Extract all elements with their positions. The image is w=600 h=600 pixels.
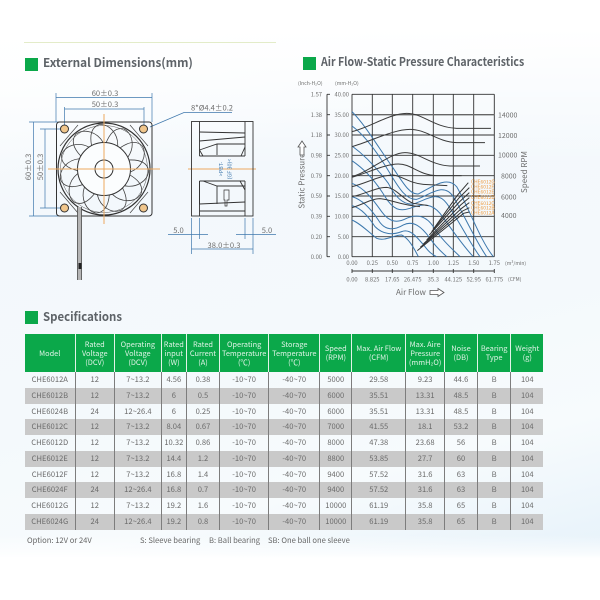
- row CHE6012C: 104: [521, 421, 534, 432]
- side view dimension lines: [168, 218, 276, 254]
- row CHE6012A: -40~70: [282, 374, 306, 385]
- bottom axis labels: 44.125: [444, 274, 462, 284]
- table header: Max. Air Flow (CFM): [356, 343, 401, 363]
- row CHE6024B: 104: [521, 406, 534, 416]
- dimension labels: 60±0.3: [23, 154, 34, 180]
- row CHE6012G: 1.6: [198, 500, 208, 511]
- row CHE6012A: 12: [91, 374, 99, 385]
- dimension labels: 38.0±0.3: [208, 240, 240, 251]
- bottom axis labels: 8.825: [365, 274, 380, 284]
- dimension labels: >PBT-: [217, 162, 225, 176]
- row CHE6012G: CHE6012G: [31, 500, 68, 511]
- left axis labels: 20.00: [335, 171, 349, 180]
- unit labels: (m³/min): [505, 260, 526, 267]
- row CHE6024B: -40~70: [282, 406, 306, 416]
- row CHE6012E: 60: [457, 453, 465, 464]
- fan blades: [55, 120, 152, 217]
- dimension labels: [23, 88, 272, 251]
- dimension labels: 60±0.3: [92, 88, 118, 99]
- bottom axis labels: 0.00: [346, 274, 358, 284]
- row CHE6012B: 35.51: [369, 390, 388, 401]
- row CHE6012D: 104: [521, 437, 534, 448]
- dimension labels: 8*Ø4.4±0.2: [191, 102, 233, 114]
- left axis labels: 1.18: [311, 130, 322, 139]
- row CHE6012A: -10~70: [232, 374, 256, 385]
- table header: [25, 334, 543, 372]
- row CHE6012G: 12: [91, 500, 99, 511]
- row CHE6012E: 8800: [327, 453, 344, 464]
- row CHE6024B: B: [492, 406, 497, 416]
- curve labels: CHE6012G: [471, 178, 495, 186]
- row CHE6012G: 35.8: [418, 500, 432, 511]
- row CHE6024G: 61.19: [369, 516, 388, 527]
- air flow chart: [296, 80, 530, 298]
- bottom axis labels: 26.475: [404, 274, 422, 284]
- row CHE6012B: [25, 388, 543, 404]
- footnote: voltage option: Option: 12V or 24V: [27, 535, 92, 546]
- row CHE6012B: 7~13.2: [126, 390, 149, 401]
- row CHE6012F: 1.4: [198, 468, 208, 480]
- right axis labels: 12000: [498, 131, 518, 141]
- dimension labels: 5.0: [262, 225, 272, 236]
- leader lines: [417, 183, 469, 251]
- left axis labels: 0.79: [311, 171, 322, 180]
- row CHE6024B: 6: [172, 406, 176, 416]
- row CHE6012G: B: [492, 500, 497, 511]
- black speed curves: [352, 113, 491, 208]
- bottom axis labels: 1.50: [468, 258, 479, 267]
- row CHE6012B: 48.5: [454, 390, 468, 401]
- curve labels: CHE6012D: [471, 194, 495, 201]
- blue pressure curves: [352, 112, 493, 257]
- row CHE6012E: 53.85: [369, 453, 388, 464]
- row CHE6012F: B: [492, 468, 497, 480]
- chart grid: [327, 94, 494, 273]
- row CHE6024G: 12~26.4: [124, 516, 152, 527]
- table header: Rated input (W): [164, 338, 184, 368]
- row CHE6012C: B: [492, 421, 497, 432]
- row CHE6012E: CHE6012E: [32, 453, 68, 464]
- row CHE6012D: -40~70: [282, 437, 306, 448]
- row CHE6024F: 63: [457, 484, 465, 495]
- fan frame: [56, 122, 152, 216]
- row CHE6024B: [31, 404, 534, 419]
- row CHE6024G: 24: [91, 516, 99, 527]
- row CHE6012E: 104: [521, 453, 534, 464]
- row CHE6012G: 65: [457, 500, 465, 511]
- axis titles: Static Pressure: [296, 153, 308, 209]
- row CHE6024G: -40~70: [282, 516, 306, 527]
- row CHE6024F: B: [492, 484, 497, 495]
- left axis labels: 15.00: [335, 191, 349, 200]
- table header: Model: [39, 348, 60, 358]
- table header: Storage Temperature (℃): [272, 338, 316, 368]
- row CHE6024F: CHE6024F: [32, 484, 68, 495]
- row CHE6012E: -40~70: [282, 453, 306, 464]
- row CHE6024F: [25, 482, 543, 498]
- row CHE6012A: 7~13.2: [126, 374, 149, 385]
- bottom axis labels: 0.75: [407, 258, 418, 267]
- right axis labels: 14000: [498, 110, 518, 120]
- footnote: ball bearing: B: Ball bearing: [209, 535, 260, 546]
- row CHE6012D: -10~70: [232, 437, 256, 448]
- bottom axis labels: 0.25: [367, 258, 378, 267]
- top rule: [24, 42, 276, 43]
- row CHE6012B: CHE6012B: [31, 390, 68, 401]
- row CHE6012B: 13.31: [416, 390, 435, 401]
- row CHE6012F: 31.6: [418, 468, 432, 480]
- row CHE6012D: 8000: [327, 437, 344, 448]
- left axis labels: 0.39: [311, 212, 322, 220]
- row CHE6012F: 63: [457, 468, 465, 480]
- row CHE6024B: -10~70: [232, 406, 256, 416]
- row CHE6024B: 13.31: [416, 406, 435, 416]
- curve labels: CHE6012F: [471, 184, 494, 190]
- row CHE6024G: 0.8: [198, 516, 208, 527]
- row CHE6012D: 7~13.2: [126, 437, 149, 448]
- unit labels: [298, 80, 526, 283]
- footnote: sleeve bearing: S: Sleeve bearing: [140, 535, 200, 546]
- row CHE6012A: CHE6012A: [32, 374, 68, 385]
- row CHE6024G: 10000: [325, 516, 346, 527]
- row CHE6012A: 0.38: [196, 374, 210, 385]
- row CHE6012C: CHE6012C: [31, 421, 68, 432]
- table header: Speed (RPM): [325, 343, 347, 363]
- row CHE6012A: 9.23: [418, 374, 432, 385]
- dimension labels: (GF 30)<: [226, 159, 234, 179]
- row CHE6012E: 27.7: [418, 453, 432, 464]
- left axis labels: 10.00: [335, 212, 349, 220]
- row CHE6012A: 5000: [327, 374, 344, 385]
- row CHE6024F: -10~70: [232, 484, 256, 495]
- left axis labels: 30.00: [335, 130, 349, 139]
- table header: Max. Aire Pressure (mmH₂O): [409, 338, 441, 368]
- row CHE6024B: 12~26.4: [124, 406, 152, 416]
- left axis labels: 5.00: [338, 232, 349, 241]
- row CHE6012C: 12: [91, 421, 99, 432]
- row CHE6012C: 7~13.2: [126, 421, 149, 432]
- row CHE6012B: 104: [521, 390, 534, 401]
- row CHE6024F: 57.52: [369, 484, 388, 495]
- row CHE6012A: B: [492, 374, 497, 385]
- row CHE6024F: 9400: [327, 484, 344, 495]
- row CHE6012C: [25, 419, 543, 435]
- row CHE6012G: 19.2: [166, 500, 181, 511]
- row CHE6012F: 12: [91, 468, 99, 480]
- left axis labels: [311, 90, 349, 261]
- table header: Rated Current (A): [190, 338, 216, 368]
- left axis labels: 25.00: [335, 150, 349, 160]
- row CHE6012F: 104: [521, 468, 534, 480]
- row CHE6012C: -10~70: [232, 421, 256, 432]
- row CHE6012D: [31, 435, 534, 451]
- row CHE6012E: 12: [91, 453, 99, 464]
- curve labels: CHE6012B: [471, 204, 495, 212]
- row CHE6012F: CHE6012F: [32, 468, 68, 480]
- row CHE6012D: CHE6012D: [31, 437, 68, 448]
- right axis labels: 6000: [501, 192, 517, 202]
- row CHE6012F: -40~70: [282, 468, 306, 480]
- table header: Rated Voltage (DCV): [82, 338, 108, 368]
- row CHE6012G: -10~70: [232, 500, 256, 511]
- dimension labels: 5.0: [173, 225, 184, 236]
- bottom axis labels: 52.95: [466, 274, 481, 284]
- axis titles: Speed RPM: [519, 151, 530, 193]
- row CHE6012D: 0.86: [196, 437, 210, 448]
- left axis labels: 0.00: [338, 252, 349, 261]
- left axis labels: 0.59: [311, 191, 322, 200]
- row CHE6024B: 0.25: [196, 406, 210, 416]
- row CHE6012C: 53.2: [454, 421, 468, 432]
- corner mounting holes: [60, 125, 148, 212]
- table header: Operating Temperature (℃): [222, 338, 266, 368]
- row CHE6012F: -10~70: [232, 468, 256, 480]
- row CHE6024B: 48.5: [454, 406, 468, 416]
- axis titles: [296, 151, 530, 298]
- row CHE6012G: [31, 498, 534, 514]
- row CHE6024F: 104: [521, 484, 534, 495]
- unit labels: (mm-H₂O): [335, 80, 359, 87]
- row CHE6012C: 8.04: [166, 421, 181, 432]
- row CHE6012A: 104: [521, 374, 534, 385]
- dimension labels: 50±0.3: [92, 99, 118, 110]
- bottom axis labels: 61.775: [485, 274, 503, 284]
- front view fan drawing: [29, 93, 256, 280]
- row CHE6012D: 10.32: [164, 437, 183, 448]
- row CHE6012G: 10000: [325, 500, 346, 511]
- right axis labels: 8000: [501, 172, 517, 182]
- row CHE6012C: 18.1: [418, 421, 432, 432]
- left axis labels: 35.00: [335, 110, 349, 119]
- row CHE6012B: 6: [172, 390, 176, 401]
- row CHE6012C: -40~70: [282, 421, 306, 432]
- row CHE6024F: 16.8: [166, 484, 181, 495]
- left axis labels: 40.00: [335, 90, 349, 98]
- right axis labels: [498, 110, 518, 221]
- cable: [78, 207, 82, 280]
- axis titles: Air Flow: [396, 287, 427, 298]
- row CHE6012A: 29.58: [369, 374, 388, 385]
- row CHE6012A: 44.6: [454, 374, 468, 385]
- row CHE6012C: 41.55: [369, 421, 388, 432]
- row CHE6012B: 12: [91, 390, 99, 401]
- row CHE6012B: 0.5: [198, 390, 208, 401]
- row CHE6024B: 24: [91, 406, 99, 416]
- bottom axis labels: 0.50: [387, 258, 398, 267]
- row CHE6012G: 61.19: [369, 500, 388, 511]
- bottom axis labels: 0.00: [346, 258, 358, 267]
- bottom axis labels: 35.3: [428, 274, 439, 284]
- row CHE6024G: -10~70: [232, 516, 256, 527]
- left axis labels: 1.38: [311, 110, 322, 119]
- row CHE6012E: [25, 451, 543, 466]
- row CHE6012B: 6000: [327, 390, 344, 401]
- heading: air flow chart: Air Flow-Static Pressure Characteristics: [321, 53, 524, 70]
- unit labels: (Inch-H₂O): [298, 80, 323, 87]
- row CHE6012B: -40~70: [282, 390, 306, 401]
- row CHE6024F: 24: [91, 484, 99, 495]
- curve labels: CHE6012C: [471, 200, 495, 207]
- row CHE6012D: 47.38: [369, 437, 388, 448]
- orange centre lines: [48, 114, 160, 224]
- row CHE6024F: 31.6: [418, 484, 432, 495]
- row CHE6024B: 35.51: [369, 406, 388, 416]
- left axis labels: 0.98: [311, 150, 322, 160]
- bottom axis labels: 1.00: [428, 258, 439, 267]
- unit labels: (CFM): [508, 276, 522, 283]
- right axis labels: 4000: [501, 211, 517, 221]
- row CHE6024G: 104: [521, 516, 534, 527]
- row CHE6024G: 35.8: [418, 516, 432, 527]
- bottom axis labels: 1.25: [448, 258, 459, 267]
- row CHE6024G: 19.2: [166, 516, 181, 527]
- row CHE6012B: B: [492, 390, 497, 401]
- table header: Noise (DB): [451, 343, 471, 363]
- row CHE6012E: 1.2: [198, 453, 208, 464]
- row CHE6012F: [32, 467, 534, 482]
- curve labels: [471, 178, 495, 216]
- row CHE6024G: CHE6024G: [31, 516, 68, 527]
- side view fan drawing: [168, 122, 276, 254]
- left axis labels: 0.00: [311, 252, 322, 261]
- row CHE6012B: -10~70: [232, 390, 256, 401]
- table header: Bearing Type: [481, 343, 507, 363]
- bottom axis labels: 1.75: [489, 258, 500, 267]
- row CHE6024F: 0.7: [198, 484, 208, 495]
- footnote: one ball one sleeve: SB: One ball one sleeve: [268, 535, 350, 546]
- bottom axis labels: [346, 258, 503, 284]
- row CHE6012E: B: [492, 453, 497, 464]
- table header: Weight (g): [515, 343, 539, 363]
- row CHE6024G: [25, 514, 543, 530]
- axis arrows: [298, 141, 444, 296]
- row CHE6012D: 12: [91, 437, 99, 448]
- row CHE6024F: -40~70: [282, 484, 306, 495]
- row CHE6012G: -40~70: [282, 500, 306, 511]
- curve labels: CHE6012A: [471, 210, 494, 216]
- bottom axis labels: 17.65: [385, 274, 400, 284]
- left axis labels: 1.57: [311, 90, 322, 98]
- curve labels: CHE6012E: [471, 188, 494, 196]
- right axis labels: 10000: [498, 150, 518, 160]
- row CHE6012D: 23.68: [416, 437, 435, 448]
- row CHE6012F: 57.52: [369, 468, 388, 480]
- row CHE6012G: 7~13.2: [126, 500, 149, 511]
- row CHE6012E: 7~13.2: [126, 453, 149, 464]
- row CHE6012C: 0.67: [196, 421, 210, 432]
- row CHE6012D: B: [492, 437, 497, 448]
- row CHE6012D: 56: [457, 437, 465, 448]
- row CHE6024G: B: [492, 516, 497, 527]
- row CHE6012F: 7~13.2: [126, 468, 149, 480]
- heading: external dimensions: External Dimensions(mm): [43, 54, 193, 71]
- row CHE6012C: 7000: [327, 421, 344, 432]
- table header: Operating Voltage (DCV): [121, 338, 155, 368]
- row CHE6012G: 104: [521, 500, 534, 511]
- row CHE6012A: [32, 372, 534, 388]
- row CHE6024B: CHE6024B: [31, 406, 68, 416]
- row CHE6012F: 16.8: [166, 468, 181, 480]
- row CHE6024F: 12~26.4: [124, 484, 152, 495]
- row CHE6024B: 6000: [327, 406, 344, 416]
- row CHE6012E: -10~70: [232, 453, 256, 464]
- row CHE6012E: 14.4: [166, 453, 181, 464]
- row CHE6024G: 65: [457, 516, 465, 527]
- dimension labels: 50±0.3: [35, 154, 46, 180]
- row CHE6012F: 9400: [327, 468, 344, 480]
- left axis labels: 0.20: [311, 232, 322, 241]
- dimension lines: front view: [29, 93, 232, 216]
- heading: specifications: Specifications: [43, 308, 122, 325]
- specifications table: [25, 334, 543, 530]
- row CHE6012A: 4.56: [166, 374, 181, 385]
